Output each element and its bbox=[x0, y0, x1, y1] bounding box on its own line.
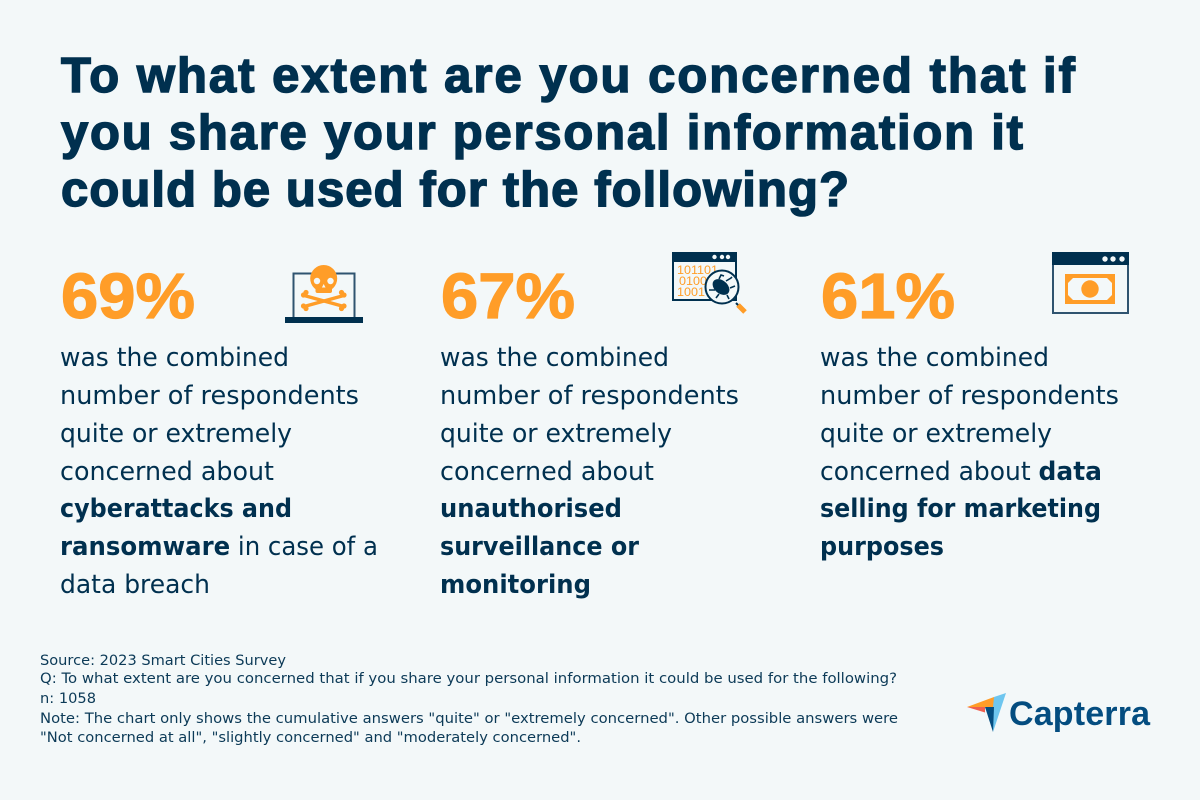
body text: selling for marketing bbox=[820, 494, 1101, 524]
icon: browser with bug under magnifier bbox=[672, 252, 745, 312]
icon: Capterra arrow bbox=[967, 693, 1006, 732]
source notes: Note: The chart only shows the cumulative answers "quite" or "extremely concerned". Other possible answers were bbox=[40, 711, 898, 727]
body text: concerned about bbox=[440, 457, 654, 487]
body text: number of respondents bbox=[820, 381, 1119, 411]
source notes: Source: 2023 Smart Cities Survey bbox=[40, 653, 286, 669]
panel: cyberattacks statistic bbox=[60, 260, 378, 600]
icon: browser with bug under magnifier: 101101 bbox=[677, 263, 718, 277]
body text: number of respondents bbox=[440, 381, 739, 411]
body text: was the combined bbox=[60, 343, 289, 373]
icon: browser with banknote bbox=[1052, 252, 1129, 313]
stat: 69%: 69% bbox=[61, 260, 195, 332]
body text: data breach bbox=[60, 570, 210, 600]
body text: ransomware in case of a bbox=[60, 532, 378, 562]
body text bbox=[60, 343, 378, 600]
source notes: n: 1058 bbox=[40, 691, 96, 707]
source notes: Q: To what extent are you concerned that if you share your personal information it could be used for the following? bbox=[40, 671, 897, 687]
title bbox=[61, 49, 1076, 217]
source notes bbox=[40, 653, 898, 746]
title: To what extent are you concerned that if bbox=[61, 49, 1076, 103]
panel: surveillance statistic bbox=[440, 252, 745, 600]
panel: data selling statistic bbox=[820, 252, 1129, 562]
body text: concerned about bbox=[60, 457, 274, 487]
body text: surveillance or bbox=[440, 532, 639, 562]
body text: monitoring bbox=[440, 570, 591, 600]
icon: browser with bug under magnifier: 0100 bbox=[679, 274, 707, 288]
body text bbox=[440, 343, 739, 600]
body text: was the combined bbox=[820, 343, 1049, 373]
stat: 61%: 61% bbox=[821, 260, 955, 332]
body text: quite or extremely bbox=[820, 419, 1052, 449]
logo: Capterra bbox=[967, 693, 1151, 733]
title: could be used for the following? bbox=[61, 163, 849, 217]
body text: number of respondents bbox=[60, 381, 359, 411]
wordmark: Capterra bbox=[1009, 695, 1151, 733]
title: you share your personal information it bbox=[61, 106, 1023, 160]
body text: purposes bbox=[820, 532, 944, 562]
icon: skull on laptop bbox=[285, 265, 363, 323]
body text: concerned about data bbox=[820, 457, 1102, 487]
body text: was the combined bbox=[440, 343, 669, 373]
stat: 67%: 67% bbox=[441, 260, 575, 332]
body text: quite or extremely bbox=[440, 419, 672, 449]
body text: quite or extremely bbox=[60, 419, 292, 449]
body text bbox=[820, 343, 1119, 562]
body text: cyberattacks and bbox=[60, 494, 292, 524]
body text: unauthorised bbox=[440, 494, 622, 524]
source notes: "Not concerned at all", "slightly concerned" and "moderately concerned". bbox=[40, 730, 581, 746]
icon: browser with bug under magnifier: 1001 bbox=[677, 285, 705, 299]
